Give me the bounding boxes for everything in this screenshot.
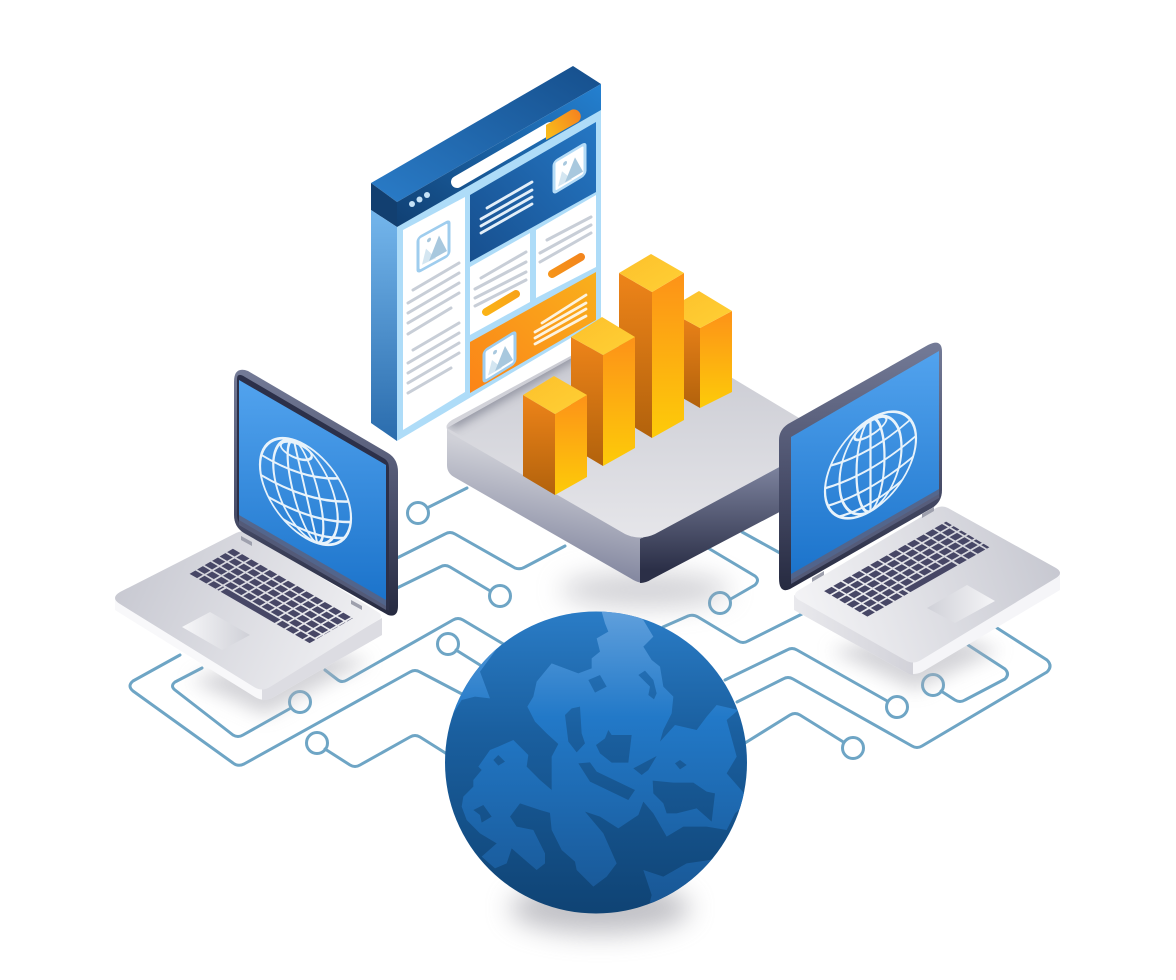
circuit lines: left <box>130 488 565 766</box>
window side <box>371 210 397 441</box>
icon: wire globe <box>824 410 918 520</box>
window dots <box>409 192 430 207</box>
thumbnail: feature <box>554 143 585 193</box>
platform left side <box>447 428 642 583</box>
window header end <box>371 183 397 227</box>
globe <box>440 607 750 914</box>
shadow: platform <box>560 572 730 608</box>
globe land <box>452 612 744 903</box>
bar 2 <box>571 317 635 466</box>
window shadow on platform <box>448 358 571 432</box>
laptop base top <box>795 506 1060 662</box>
thumbnail: column <box>418 221 449 272</box>
orange banner <box>470 272 596 393</box>
icon: wire globe <box>258 436 352 546</box>
shadow: right laptop <box>830 630 1000 690</box>
platform right side <box>640 438 829 583</box>
window top face <box>371 66 601 202</box>
card: left <box>470 233 530 335</box>
circuit lines: right <box>663 532 1050 758</box>
address bar <box>457 128 550 182</box>
hinges <box>241 536 362 610</box>
laptop base top <box>115 532 381 690</box>
left text column <box>403 197 465 430</box>
laptop screen <box>779 343 942 590</box>
platform top <box>446 323 828 538</box>
keyboard <box>827 523 986 615</box>
laptop: right <box>779 343 1060 675</box>
window frame <box>397 110 601 441</box>
thumbnail: banner <box>484 332 515 382</box>
globe lakes <box>473 671 715 823</box>
shadow: left laptop <box>190 650 370 715</box>
card: right <box>536 195 596 298</box>
bar 1 <box>523 376 587 495</box>
bar 4 <box>667 291 732 408</box>
laptop base side <box>794 573 1060 674</box>
platform <box>446 346 799 583</box>
trackpad <box>927 585 995 623</box>
laptop screen <box>234 370 398 616</box>
keyboard <box>192 550 350 642</box>
trackpad <box>182 612 250 650</box>
blue feature panel <box>470 122 596 262</box>
laptop base side <box>115 598 382 700</box>
shadow: globe <box>510 882 690 934</box>
bar chart <box>523 254 732 495</box>
bar 3 <box>619 254 684 438</box>
laptop: left <box>115 370 398 700</box>
window header front <box>397 84 601 230</box>
illustration: isometric web analytics network <box>115 66 1060 948</box>
hinges <box>812 507 934 582</box>
web page window <box>371 66 601 441</box>
